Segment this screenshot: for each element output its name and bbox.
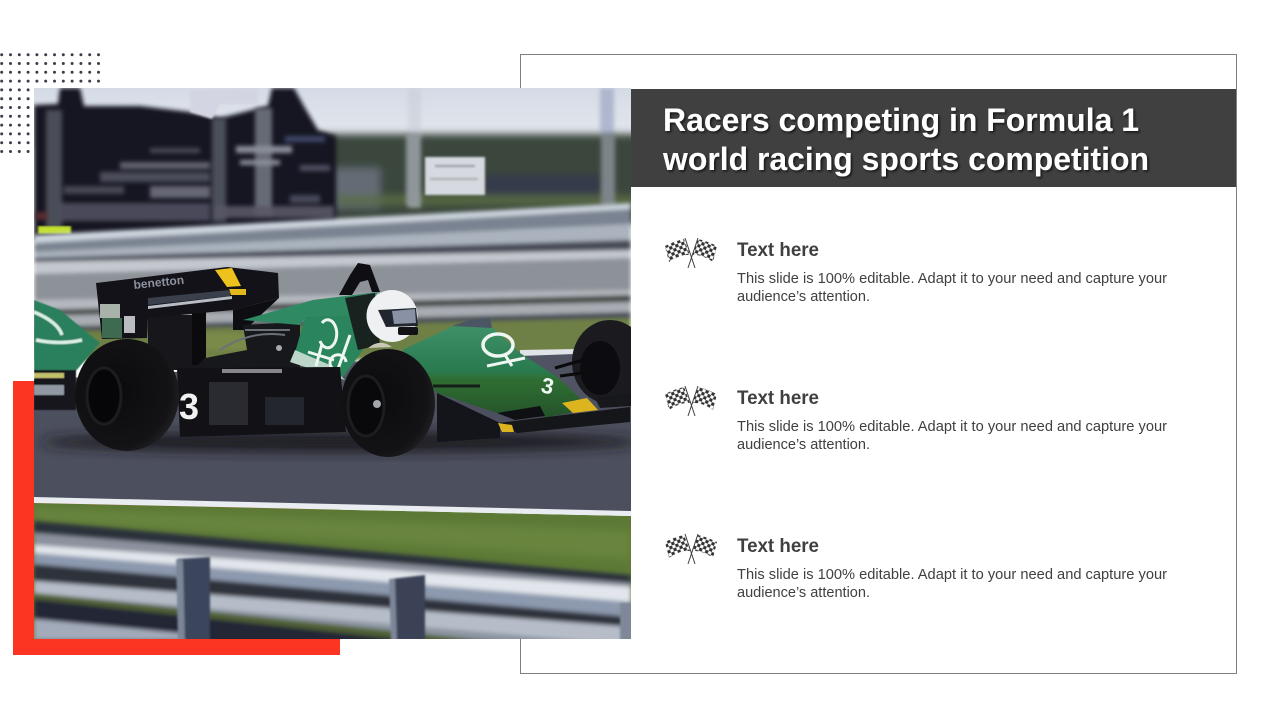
item heading: Text here xyxy=(737,388,819,409)
rear wheel xyxy=(75,339,179,451)
decorative dot grid xyxy=(0,53,100,153)
item 1 xyxy=(665,238,1167,305)
car nose xyxy=(402,318,631,442)
item heading: Text here xyxy=(737,536,819,557)
title banner xyxy=(631,89,1236,187)
roadside sign xyxy=(425,157,485,195)
item 3 xyxy=(665,534,1167,601)
title text xyxy=(662,102,1149,177)
icon: crossed checkered flags xyxy=(665,386,717,416)
car green bodywork xyxy=(243,292,380,380)
item heading: Text here xyxy=(737,240,819,261)
rear wing: benetton xyxy=(133,273,185,292)
car side pod with number 3: 3 xyxy=(179,386,199,427)
rear wing xyxy=(96,267,279,339)
car nose: 3 xyxy=(539,372,556,399)
upper guardrail xyxy=(34,203,631,360)
icon: crossed checkered flags xyxy=(665,238,717,268)
photo: Formula 1 racing car on track xyxy=(34,88,648,650)
item description: audience’s attention. xyxy=(737,585,870,601)
front wheel xyxy=(341,349,435,457)
driver helmet xyxy=(366,290,418,348)
roll hoop xyxy=(339,263,380,295)
item 2 xyxy=(665,386,1167,453)
second car at left edge xyxy=(34,300,100,410)
trackside white line and grass xyxy=(34,497,631,640)
rear suspension and air box xyxy=(148,298,279,370)
icon: crossed checkered flags xyxy=(665,534,717,564)
car side pod with number 3 xyxy=(177,367,346,437)
track surface xyxy=(34,349,640,512)
lower guardrail xyxy=(34,521,633,650)
item description: audience’s attention. xyxy=(737,437,870,453)
red accent block xyxy=(13,381,340,655)
item description xyxy=(737,567,1167,601)
far front wheel xyxy=(554,320,631,402)
item description: This slide is 100% editable. Adapt it to your need and capture your xyxy=(737,567,1167,583)
title text: world racing sports competition xyxy=(662,141,1149,177)
item description xyxy=(737,419,1167,453)
car engine xyxy=(195,322,300,368)
title text: Racers competing in Formula 1 xyxy=(663,102,1139,138)
item description: This slide is 100% editable. Adapt it to your need and capture your xyxy=(737,271,1167,287)
item description: audience’s attention. xyxy=(737,289,870,305)
item description: This slide is 100% editable. Adapt it to your need and capture your xyxy=(737,419,1167,435)
item description xyxy=(737,271,1167,305)
content panel outline xyxy=(520,54,1236,674)
photo background: sky, trees, crowd xyxy=(34,88,640,240)
